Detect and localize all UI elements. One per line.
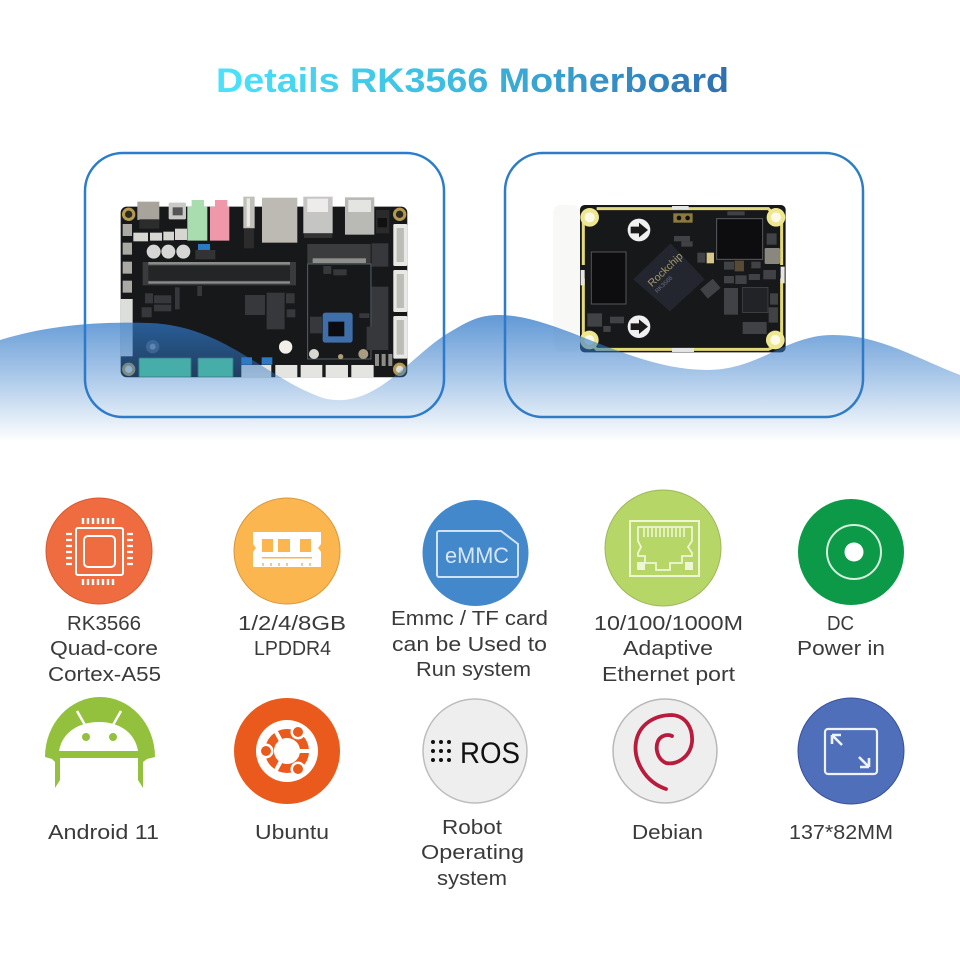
- label: Ubuntu: Ubuntu: [255, 821, 329, 844]
- icon: Android logo: [45, 697, 155, 788]
- label: 1/2/4/8GB: 1/2/4/8GB: [238, 612, 346, 635]
- feature: board size: [789, 698, 904, 844]
- icon: eMMC card: [422, 500, 528, 606]
- photo: core module: [553, 205, 786, 352]
- photo: core module: RK3566: [655, 275, 675, 295]
- label: Ethernet port: Ethernet port: [602, 663, 735, 686]
- label: Emmc / TF card: Emmc / TF card: [391, 607, 548, 630]
- board connectors: teal terminals: [139, 358, 233, 377]
- panel: core module frame: [505, 153, 863, 417]
- icon: ROS logo: ROS: [460, 737, 520, 770]
- label: 137*82MM: 137*82MM: [789, 821, 893, 844]
- icon: Debian swirl: [613, 699, 717, 803]
- label: Robot: Robot: [442, 816, 502, 839]
- label: Cortex-A55: Cortex-A55: [48, 663, 161, 686]
- title: Details RK3566 Motherboard: [216, 62, 729, 100]
- feature: Debian: [613, 699, 717, 844]
- wave background: [0, 315, 960, 442]
- label: Operating: Operating: [421, 841, 524, 864]
- label: RK3566: RK3566: [67, 612, 141, 635]
- label: DC: DC: [827, 612, 854, 635]
- label: can be Used to: can be Used to: [392, 633, 547, 656]
- icon: Ubuntu logo: [234, 698, 340, 804]
- icon: resize frame: [798, 698, 904, 804]
- label: Debian: Debian: [632, 821, 703, 844]
- label: Quad-core: Quad-core: [50, 637, 158, 660]
- icon: DC jack: [798, 499, 904, 605]
- feature: DC power: [797, 499, 904, 660]
- label: system: system: [437, 867, 507, 890]
- feature: eMMC / TF card: [391, 500, 548, 681]
- icon: CPU chip: [46, 498, 152, 604]
- label: 10/100/1000M: 10/100/1000M: [594, 612, 743, 635]
- icon: eMMC card: eMMC: [445, 543, 509, 568]
- feature: RK3566 CPU: [46, 498, 161, 686]
- feature: LPDDR4 RAM: [234, 498, 346, 660]
- label: Power in: Power in: [797, 637, 885, 660]
- photo: carrier board: [121, 197, 407, 377]
- icon: RJ45 port: [605, 490, 721, 606]
- feature: ROS: [421, 699, 527, 890]
- feature: Ethernet: [594, 490, 743, 686]
- icon: RAM stick: [234, 498, 340, 604]
- label: Run system: Run system: [416, 658, 531, 681]
- photo: core module: Rockchip: [646, 250, 686, 289]
- feature: Ubuntu: [234, 698, 340, 844]
- panel: carrier board frame: [85, 153, 444, 417]
- icon: ROS logo: [423, 699, 527, 803]
- feature: Android: [45, 697, 159, 844]
- label: Android 11: Android 11: [48, 821, 159, 844]
- label: Adaptive: Adaptive: [623, 637, 713, 660]
- label: LPDDR4: LPDDR4: [254, 637, 331, 660]
